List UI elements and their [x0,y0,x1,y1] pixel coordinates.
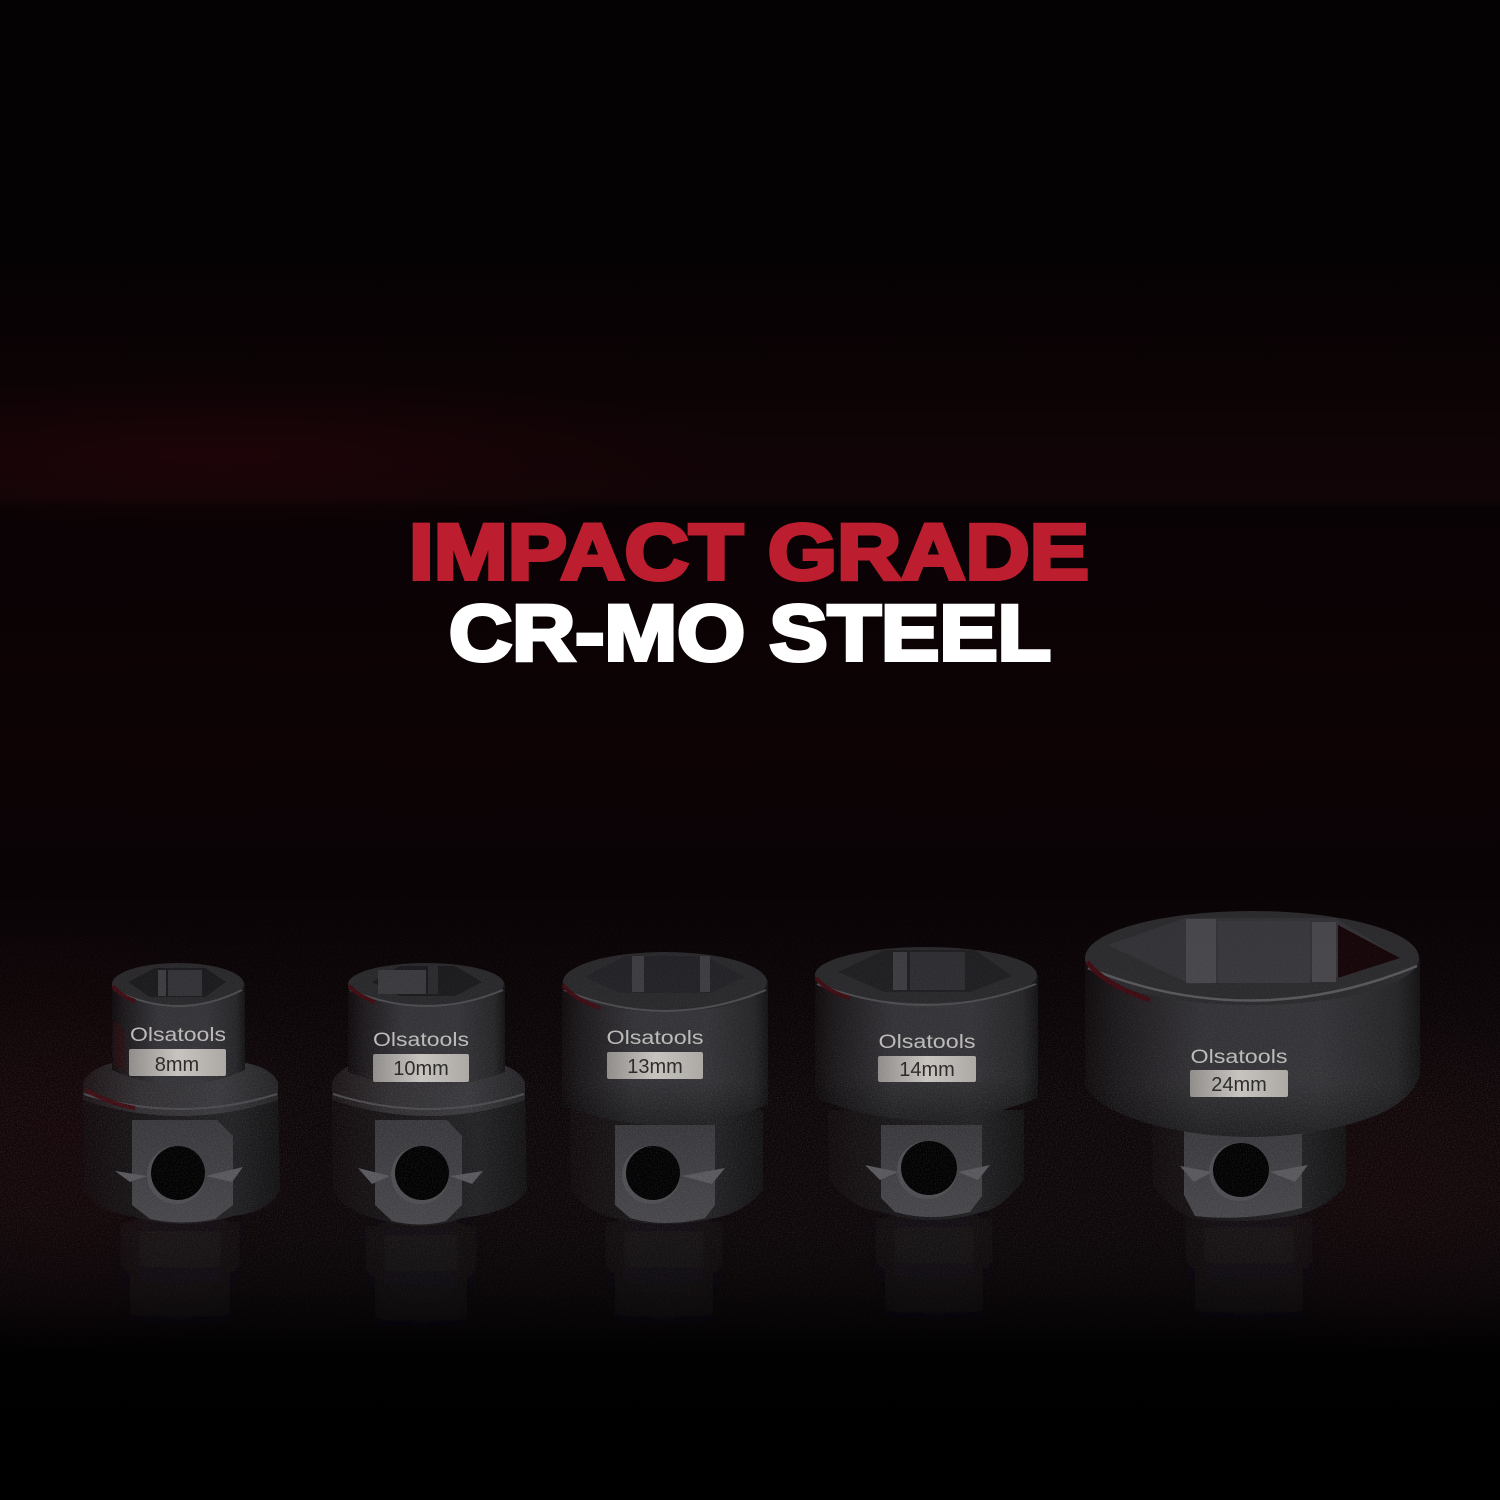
socket: 8mm [83,963,280,1224]
hex opening [372,966,482,996]
drive flat [881,1125,982,1217]
socket: 13mm: Olsatools [606,1028,704,1049]
socket: 8mm: Olsatools [130,1025,226,1046]
hex opening [838,950,1012,992]
base [570,1110,763,1224]
socket: 24mm: Olsatools [1190,1047,1288,1068]
ball detent groove [682,1168,725,1184]
socket: 24mm: 24mm [1211,1074,1267,1096]
bore [1209,1143,1269,1201]
ball detent grooves [115,1167,243,1182]
drive flat [615,1125,715,1223]
rim [348,963,504,1005]
reflections of the sockets on the floor [130,1218,1303,1346]
bore [391,1146,449,1204]
size plate [878,1056,976,1082]
base [83,1095,280,1224]
cylinder [112,983,245,1085]
collar [83,1062,278,1116]
drive flat [132,1120,233,1222]
socket: 14mm [815,947,1038,1220]
base [332,1095,527,1226]
rim [815,947,1037,1003]
socket: 10mm: Olsatools [373,1030,469,1051]
socket: 8mm: 8mm [155,1054,199,1076]
rim [563,952,767,1012]
base [1152,1125,1346,1221]
socket: 10mm: 10mm [393,1058,449,1080]
ball detent grooves [1180,1165,1308,1182]
ball detent grooves [358,1168,483,1184]
bore [622,1146,680,1204]
drive flat [1184,1125,1302,1218]
socket row [83,911,1420,1226]
hex opening [585,956,745,993]
cylinder [348,983,505,1087]
heading: cr-mo steel: CR-MO STEEL [449,588,1051,677]
socket: 10mm [332,963,527,1226]
hex opening [128,968,226,997]
ball detent grooves [865,1165,990,1180]
socket: 13mm [562,952,768,1224]
hex opening [1108,918,1400,984]
size plate [1190,1070,1288,1097]
bore [897,1141,957,1199]
base [828,1110,1024,1220]
heading: impact grade: IMPACT GRADE [409,507,1089,596]
cylinder [815,975,1038,1120]
bore [147,1146,205,1204]
collar [332,1062,525,1116]
cylinder [562,980,768,1125]
drive flat [375,1120,462,1224]
socket: 24mm [1085,911,1420,1221]
size plate [607,1052,703,1079]
socket: 13mm: 13mm [627,1056,683,1078]
size plate [373,1054,469,1082]
title [409,507,1089,677]
socket: 14mm: Olsatools [878,1032,976,1053]
cylinder [1085,958,1420,1137]
socket: 14mm: 14mm [899,1059,955,1081]
rim [112,963,244,1005]
size plate [129,1049,226,1076]
rim [1085,911,1419,1005]
